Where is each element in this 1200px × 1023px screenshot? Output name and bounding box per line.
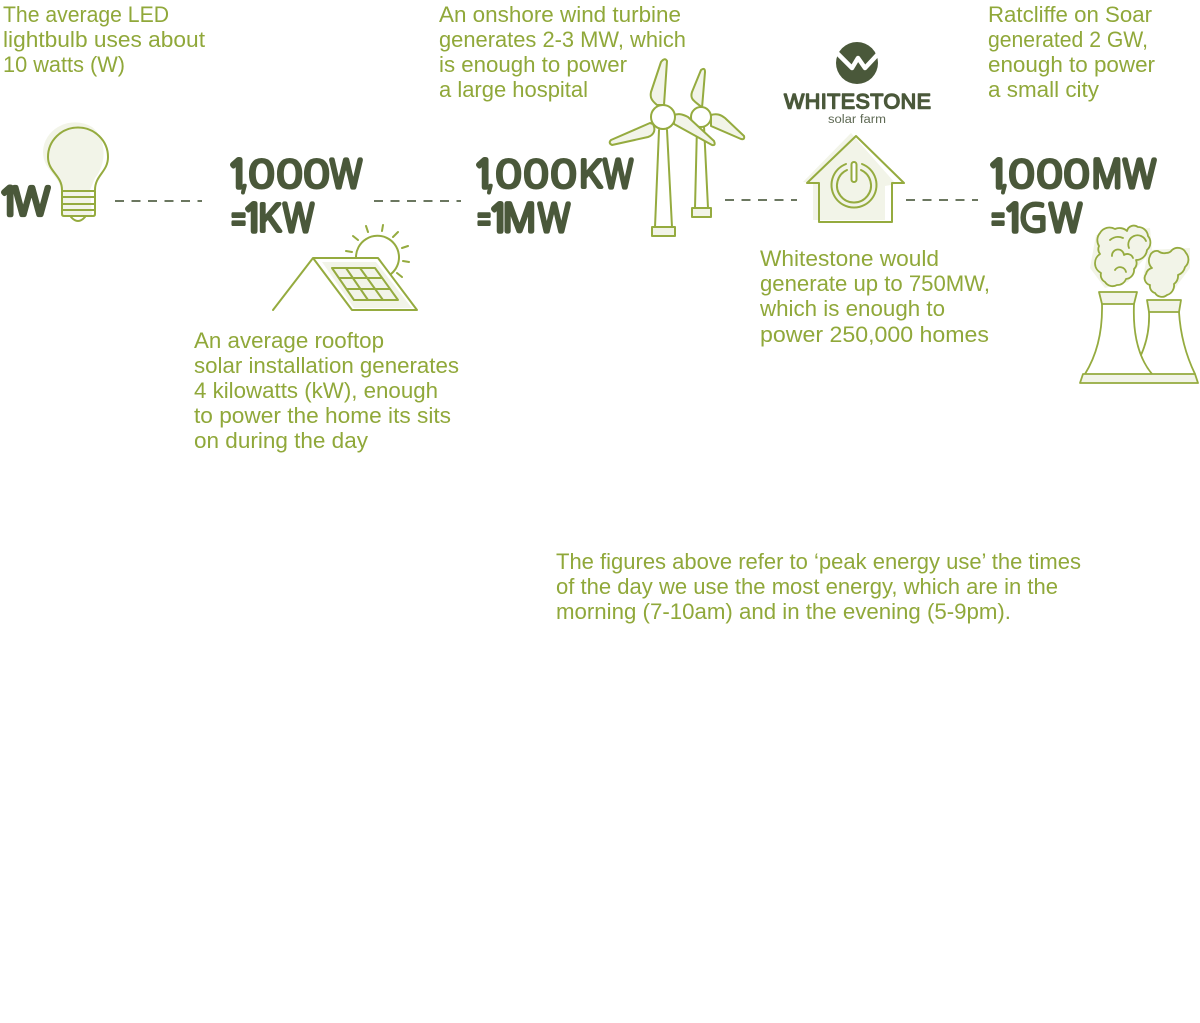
connector: turbine to house bbox=[725, 199, 797, 201]
heading: 1,000MW = 1GW: = bbox=[991, 200, 1005, 238]
heading: 1,000W = 1KW: 0 bbox=[248, 156, 275, 194]
steam clouds bbox=[1090, 226, 1190, 297]
text: LED lightbulb: 10 watts (W) bbox=[3, 52, 125, 77]
text: rooftop solar: on during the day bbox=[194, 428, 368, 453]
text: rooftop solar: solar installation generates bbox=[194, 353, 459, 378]
small turbine bbox=[691, 69, 744, 217]
note: peak energy use bbox=[556, 549, 1081, 624]
heading: 1,000KW = 1MW: 1 bbox=[488, 200, 510, 238]
heading: 1,000W = 1KW: 1 bbox=[242, 200, 264, 238]
heading: 1W: W bbox=[13, 183, 50, 221]
text: wind turbine: An onshore wind turbine bbox=[439, 2, 681, 27]
text: LED lightbulb: The average LED bbox=[3, 2, 169, 27]
heading: 1,000W = 1KW: 0 bbox=[276, 156, 303, 194]
heading: 1,000W = 1KW: W bbox=[330, 156, 362, 194]
text: Whitestone output: which is enough to bbox=[759, 296, 945, 321]
heading: 1,000MW = 1GW: 1 bbox=[987, 156, 1009, 194]
text: LED lightbulb bbox=[3, 2, 205, 77]
heading: 1,000W = 1KW: K bbox=[257, 200, 282, 238]
heading: 1,000W = 1KW: , bbox=[240, 156, 248, 194]
heading: 1,000KW = 1MW: 1 bbox=[473, 156, 495, 194]
text: rooftop solar: to power the home its sits bbox=[194, 403, 451, 428]
logo wordmark: WHITESTONE bbox=[784, 90, 931, 114]
note: peak energy use: of the day we use the most energy, which are in the bbox=[556, 574, 1058, 599]
heading: 1,000KW = 1MW: K bbox=[578, 156, 603, 194]
heading: 1,000KW = 1MW bbox=[473, 156, 633, 238]
heading: 1,000KW = 1MW: 0 bbox=[550, 156, 577, 194]
text: wind turbine: generates 2-3 MW, which bbox=[439, 27, 686, 52]
text: Whitestone output: Whitestone would bbox=[760, 246, 939, 271]
icon: wind turbines bbox=[610, 59, 744, 236]
text: rooftop solar bbox=[194, 328, 459, 453]
large turbine bbox=[610, 59, 715, 236]
heading: 1,000W = 1KW: 0 bbox=[303, 156, 330, 194]
text: wind turbine: is enough to power bbox=[439, 52, 627, 77]
heading: 1,000KW = 1MW: W bbox=[603, 156, 633, 194]
heading: 1,000KW = 1MW: 0 bbox=[523, 156, 549, 194]
heading: 1,000KW = 1MW: , bbox=[486, 156, 494, 194]
note: peak energy use: The figures above refer to ‘peak energy use’ the times bbox=[556, 549, 1081, 574]
heading: 1,000MW = 1GW: , bbox=[1000, 156, 1008, 194]
text: Whitestone output bbox=[759, 246, 990, 347]
text: Whitestone output: generate up to 750MW, bbox=[760, 271, 990, 296]
heading: 1,000W = 1KW: W bbox=[283, 200, 314, 238]
heading: 1,000MW = 1GW: G bbox=[1019, 200, 1048, 238]
text: wind turbine: a large hospital bbox=[439, 77, 588, 102]
logo mark bbox=[836, 42, 879, 84]
note: peak energy use: morning (7-10am) and in the evening (5-9pm). bbox=[556, 599, 1011, 624]
heading: 1,000KW = 1MW: = bbox=[477, 200, 491, 238]
cooling towers bbox=[1080, 292, 1198, 383]
heading: 1,000MW = 1GW: 0 bbox=[1036, 156, 1063, 194]
text: LED lightbulb: lightbulb uses about bbox=[3, 27, 205, 52]
heading: 1,000W = 1KW: = bbox=[231, 200, 246, 238]
icon: rooftop solar panel and sun bbox=[273, 225, 417, 310]
heading: 1,000MW = 1GW: W bbox=[1049, 200, 1082, 238]
icon: house with power symbol bbox=[803, 133, 904, 222]
heading: 1,000MW = 1GW bbox=[987, 156, 1156, 238]
icon: cooling towers with steam bbox=[1080, 226, 1198, 383]
heading: 1,000MW = 1GW: W bbox=[1123, 156, 1156, 194]
text: Ratcliffe on Soar: Ratcliffe on Soar bbox=[988, 2, 1152, 27]
logo: Whitestone solar farm bbox=[784, 42, 931, 126]
heading: 1,000MW = 1GW: M bbox=[1092, 156, 1122, 194]
icon: lightbulb bbox=[43, 122, 108, 221]
connector: bulb to kilowatt bbox=[115, 200, 202, 202]
text: wind turbine bbox=[439, 2, 686, 102]
heading: 1,000W = 1KW bbox=[227, 156, 362, 238]
logo subtitle: solar farm bbox=[828, 114, 886, 126]
heading: 1,000MW = 1GW: 0 bbox=[1008, 156, 1035, 194]
text: Ratcliffe on Soar bbox=[988, 2, 1155, 102]
connector: kilowatt to megawatt bbox=[374, 200, 461, 202]
connector: house to gigawatt bbox=[906, 199, 978, 201]
text: Whitestone output: power 250,000 homes bbox=[760, 322, 989, 347]
heading: 1,000W = 1KW: 1 bbox=[227, 156, 249, 194]
text: Ratcliffe on Soar: generated 2 GW, bbox=[988, 27, 1148, 52]
text: Ratcliffe on Soar: enough to power bbox=[988, 52, 1155, 77]
text: rooftop solar: 4 kilowatts (kW), enough bbox=[194, 378, 438, 403]
heading: 1,000MW = 1GW: 0 bbox=[1063, 156, 1090, 194]
heading: 1,000KW = 1MW: M bbox=[503, 200, 536, 238]
heading: 1,000KW = 1MW: 0 bbox=[495, 156, 522, 194]
heading: 1,000MW = 1GW: 1 bbox=[1003, 200, 1025, 238]
text: Ratcliffe on Soar: a small city bbox=[988, 77, 1099, 102]
heading: 1,000KW = 1MW: W bbox=[538, 200, 570, 238]
text: rooftop solar: An average rooftop bbox=[194, 328, 384, 353]
